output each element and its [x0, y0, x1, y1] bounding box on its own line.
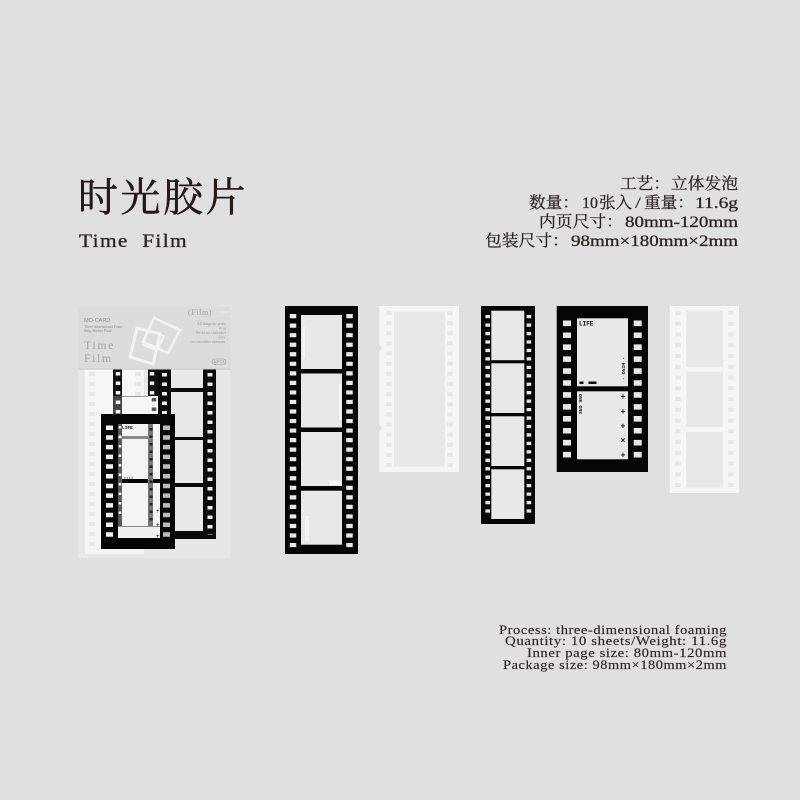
package header card: We do not remember — [196, 331, 227, 335]
frame marks: plus signs: + — [621, 407, 626, 416]
front black strip inside package: + — [156, 509, 160, 515]
package header card — [78, 307, 230, 370]
front black strip inside package — [101, 414, 175, 549]
frames — [577, 318, 628, 459]
perforations — [678, 311, 731, 488]
white strip inside package — [85, 369, 144, 554]
frame marks: plus signs: + — [621, 422, 626, 430]
front black strip inside package: + — [156, 534, 160, 540]
specifications: English: Quantity: 10 sheets/Weight: 11.6g — [505, 634, 727, 648]
package header card: MO-CARD — [84, 318, 110, 324]
front black strip inside package: + — [156, 523, 160, 529]
specifications: English — [499, 623, 727, 672]
specifications: English: Process: three-dimensional foaming — [499, 623, 727, 637]
frame text: LIFE: LIFE — [579, 320, 594, 328]
specifications: Chinese: 工艺： — [620, 171, 670, 194]
specifications: Chinese: 包装尺寸： — [485, 228, 569, 251]
specifications: Chinese — [485, 171, 739, 251]
frame marks: plus signs: + — [621, 392, 626, 401]
narrow black strip inside package — [113, 369, 158, 416]
package header card: Film — [84, 351, 113, 365]
frames — [686, 311, 723, 488]
film strip 2: white single-frame — [377, 306, 459, 472]
package header card: to us — [219, 326, 227, 330]
package header card: (Film) — [188, 308, 212, 317]
perforations — [567, 320, 638, 462]
package header card: days, — [218, 336, 226, 340]
specifications: Chinese: / — [635, 195, 642, 212]
perforations — [389, 311, 450, 468]
frames — [491, 311, 524, 519]
frame text: vertical right: - ONIM - — [621, 357, 627, 380]
specifications: English: Inner page size: 80mm-120mm — [527, 646, 727, 660]
front black strip inside package: ▪ ▪▪▪▪ — [119, 477, 133, 481]
specifications: Chinese: 张入 — [599, 190, 632, 213]
package clear bag — [78, 307, 230, 558]
frame text: vertical left: ONE ONE — [577, 394, 583, 414]
frame text: dot marks — [580, 382, 596, 384]
specifications: Chinese: 立体发泡 — [671, 171, 738, 194]
front black strip inside package: LIFE — [122, 425, 133, 431]
film strip 5: white three-frame — [670, 306, 739, 493]
specifications: Chinese: 内页尺寸： — [539, 209, 623, 232]
title: English: Time Film — [79, 231, 188, 252]
package header card: 10PCS — [214, 360, 225, 364]
wide black strip inside package — [158, 369, 216, 539]
specifications: English: Package size: 98mm×180mm×2mm — [503, 658, 727, 672]
frames — [301, 315, 342, 545]
faint frame marks — [303, 327, 342, 541]
frame marks: plus signs — [621, 392, 626, 460]
package header card: Three-dimensional Foam — [84, 325, 122, 329]
film strip 4: wide black LIFE two-frame — [557, 306, 648, 472]
package header card: Time — [84, 338, 115, 352]
specifications: Chinese: 10 — [582, 195, 598, 212]
package header card: we remember moments. — [191, 340, 226, 344]
film strip 3: narrow black four-frame — [481, 306, 535, 524]
package film icon — [130, 318, 180, 364]
specifications: Chinese: 98mm×180mm×2mm — [571, 233, 739, 250]
specifications: Chinese: 重量： — [644, 190, 694, 213]
package header card: All things are pretty — [197, 322, 226, 326]
title: Chinese: 时光胶片 — [78, 166, 248, 223]
perforations — [488, 315, 529, 513]
film strip 1: black four-frame — [285, 306, 358, 554]
specifications: Chinese: 11.6g — [695, 195, 738, 212]
specifications: Chinese: 数量： — [529, 190, 579, 213]
specifications: Chinese: 80mm-120mm — [625, 214, 739, 231]
perforations — [293, 314, 350, 548]
frame marks: plus signs: × — [621, 436, 626, 445]
product package mockup — [78, 307, 230, 558]
frame marks: plus signs: + — [621, 450, 626, 460]
package header card: Strip Sticker Pack — [84, 329, 112, 333]
frame — [394, 312, 445, 467]
